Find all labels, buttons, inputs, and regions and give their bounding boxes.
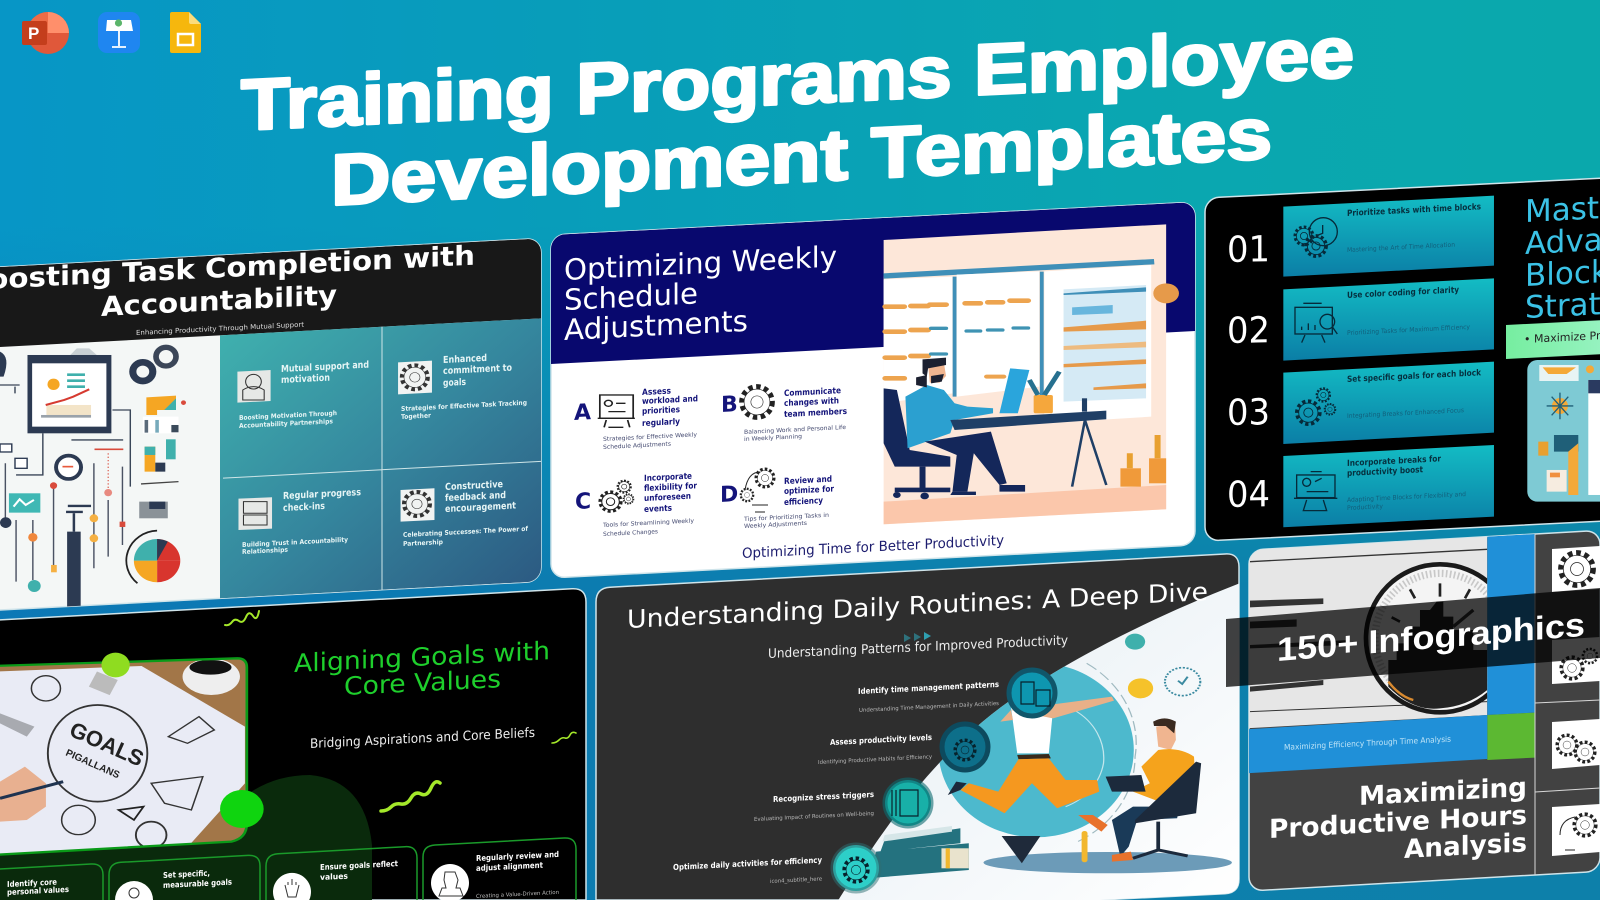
title [241,13,1354,221]
panel: productive hours [1247,530,1600,891]
heading: boosting task completion [0,244,473,316]
item D: review and optimize: Weekly Adjustments [744,521,807,530]
text: mutual support: Mutual support and [281,360,369,375]
card text: adjust alignment [476,861,543,873]
text: identify patterns: Identify time management patterns [858,680,999,696]
card text: values [320,872,348,882]
callout band: 150+ Infographics: 150+ Infographics [1277,607,1585,669]
item B: communicate changes: team members [784,407,847,420]
item B: communicate changes: B [721,392,738,418]
item B: communicate changes: in Weekly Planning [744,434,802,443]
card text: measurable goals [163,878,232,890]
text: regular progress: Relationships [242,546,288,556]
mint callout bar [1506,318,1600,359]
text: constructive feedback: Constructive [445,479,503,493]
block subtitles: Prioritizing Tasks for Maximum Efficiency [1347,324,1470,337]
heading: advanced time blocking [1525,196,1600,318]
heading: productive hours [1269,773,1527,865]
text: mutual support: Boosting Motivation Through [239,409,337,422]
illustration: desk objects [1527,360,1600,502]
item A: assess workload: regularly [642,417,680,429]
numbers 01-04 [1229,235,1268,508]
block subtitles: Productivity [1347,503,1383,512]
squiggles [225,611,576,811]
text: enhanced commitment: Strategies for Effective Task Tracking [401,399,527,413]
item A: assess workload: priorities [642,405,680,417]
text: stress triggers [754,790,874,823]
icon: Google Slides [170,12,201,53]
text: assess productivity: Assess productivity levels [830,733,932,747]
panel header bar [0,238,541,348]
item D: review and optimize [720,469,835,530]
right column icon tiles [1535,534,1600,880]
icon circles [833,670,1055,891]
icon: PowerPoint: P [28,24,39,43]
block subtitles: Integrating Breaks for Enhanced Focus [1347,407,1464,420]
text: regular progress: Building Trust in Accountability [242,536,349,549]
photo: goals sketch [0,653,264,857]
icon glyphs [844,682,1050,882]
card text: Identify core [7,877,57,889]
block titles [1347,202,1481,479]
heading: aligning goals [294,640,548,695]
block titles: Incorporate breaks for [1347,454,1442,469]
card icons [115,864,469,900]
panel: boosting task completion [0,238,541,611]
heading: aligning goals: Core Values [344,664,501,701]
block titles: productivity boost [1347,465,1423,479]
item A: assess workload: Assess [642,387,671,398]
title: Development Templates [331,94,1272,221]
block titles: Set specific goals for each block [1347,368,1481,385]
text: stress triggers: Evaluating Impact of Routines on Well-being [754,811,874,823]
numbers 01-04: 04 [1227,474,1270,516]
panel: aligning goals [0,589,586,900]
panel: weekly schedule [551,202,1195,578]
card text [7,850,559,897]
heading: daily routines: Understanding Daily Routines: A Deep Dive [627,577,1208,634]
item C: incorporate flexibility: C [575,489,591,515]
block subtitles: Adapting Time Blocks for Flexibility and [1347,491,1466,504]
panel: daily routines [596,554,1239,900]
heading: productive hours: Analysis [1404,828,1527,865]
text: optimize activities [673,856,823,885]
icon: Keynote [98,12,140,53]
callout band: 150+ Infographics [1226,588,1600,687]
text: assess productivity: Identifying Productive Habits for Efficiency [818,754,933,766]
heading: productive hours: Maximizing [1359,773,1527,812]
illustration: jumping person and laptop user [838,583,1239,900]
item C: incorporate flexibility: Incorporate [644,472,692,484]
item C: incorporate flexibility: Tools for Streamlining Weekly [602,518,695,529]
heading: productive hours: Productive Hours [1269,801,1527,845]
icon: PowerPoint [22,12,69,54]
numbers 01-04: 01 [1227,229,1270,271]
heading: weekly schedule [564,239,837,347]
text: constructive feedback [403,479,528,548]
color column: blue and green [1247,534,1535,773]
text: regular progress: check-ins [283,501,325,514]
text: assess productivity [818,733,933,766]
text: mutual support: motivation [281,373,330,386]
text: constructive feedback: encouragement [445,500,516,515]
heading: boosting task completion: Accountability [101,280,337,323]
item C: incorporate flexibility: events [644,504,672,515]
heading: weekly schedule: Schedule [564,276,698,317]
subtitle: mutual support: Enhancing Productivity Through Mutual Support [136,321,304,337]
text: identify patterns [858,680,999,714]
text: enhanced commitment [401,353,527,421]
text: regular progress: Regular progress [283,487,361,502]
photo label: goals: PIGALLANS [64,748,121,781]
item D: review and optimize: D [720,482,738,508]
heading: weekly schedule: Adjustments [564,304,748,347]
item A: assess workload: Strategies for Effective Weekly [603,432,698,443]
item A: assess workload [574,387,698,451]
list blocks [1283,196,1494,527]
item C: incorporate flexibility: flexibility for [644,481,698,494]
numbers 01-04: 02 [1227,310,1270,352]
card text: Ensure goals reflect [320,859,398,872]
illustration: dashboard circuit [0,347,186,607]
block subtitles [1347,242,1470,512]
item A: assess workload: Schedule Adjustments [603,442,671,451]
heading: aligning goals: Aligning Goals with [294,636,550,678]
block titles: Prioritize tasks with time blocks [1347,202,1481,219]
icon tiles for the grid [237,361,434,530]
text: enhanced commitment: Enhanced [443,353,487,366]
text: identify patterns: Understanding Time Management in Daily Activities [859,701,999,714]
text: enhanced commitment: Together [401,411,432,421]
item A: assess workload: A [574,400,591,426]
teal feature grid [220,318,541,598]
photo: clock on grey backdrop [1247,533,1514,730]
text: mutual support: Accountability Partnerships [239,417,333,430]
item B: communicate changes: Communicate [784,386,841,399]
text: constructive feedback: Partnership [403,538,443,548]
text: optimize activities: icon4_subtitle_here [770,876,823,885]
footer caption: Optimizing Time for Better Productivity [742,533,1004,562]
text: constructive feedback: Celebrating Successes: The Power of [403,525,528,539]
item C: incorporate flexibility: Schedule Changes [603,529,658,538]
text: mutual support [239,360,369,430]
card subtitle: Creating a Value-Driven Action [476,890,559,900]
text: regular progress [242,487,361,556]
card text: Set specific, [163,869,210,880]
item A: assess workload: workload and [642,394,698,407]
numbers 01-04: 03 [1227,392,1270,434]
item C: incorporate flexibility [575,472,698,538]
subtitle: aspirations: Bridging Aspirations and Core Beliefs [310,726,535,752]
text: stress triggers: Recognize stress triggers [773,790,874,804]
card text: Regularly review and [476,850,559,863]
caption: efficiency: Maximizing Efficiency Through Time Analysis [1284,735,1451,752]
text: enhanced commitment: goals [443,377,466,389]
arrows: small teal markers [904,632,931,642]
text: optimize activities: Optimize daily activities for efficiency [673,856,823,872]
block subtitles: Mastering the Art of Time Allocation [1347,242,1455,254]
subtitle: patterns: Understanding Patterns for Improved Productivity [768,633,1068,662]
card text: personal values [7,885,69,897]
panel: time blocking list [1205,177,1600,541]
item B: communicate changes: changes with [784,396,839,409]
item D: review and optimize: Tips for Prioritizing Tasks in [743,513,829,523]
item B: communicate changes: Balancing Work and Personal Life [744,425,846,436]
photo label: goals: GOALS [66,717,148,771]
text: enhanced commitment: commitment to [443,363,512,377]
block icons [1294,218,1337,511]
heading: weekly schedule: Optimizing Weekly [564,239,837,287]
dark green blob [0,775,372,900]
item D: review and optimize: Review and [784,475,832,487]
item B: communicate changes [721,386,847,443]
item D: review and optimize: efficiency [784,496,823,508]
block titles: Use color coding for clarity [1347,285,1459,301]
text: constructive feedback: feedback and [445,490,506,504]
title: Training Programs Employee [241,13,1354,146]
item C: incorporate flexibility: unforeseen [644,492,691,504]
panel header bar [551,202,1195,364]
goal cards [0,838,576,900]
item D: review and optimize: optimize for [784,484,835,497]
illustration: person at desk [884,224,1179,524]
